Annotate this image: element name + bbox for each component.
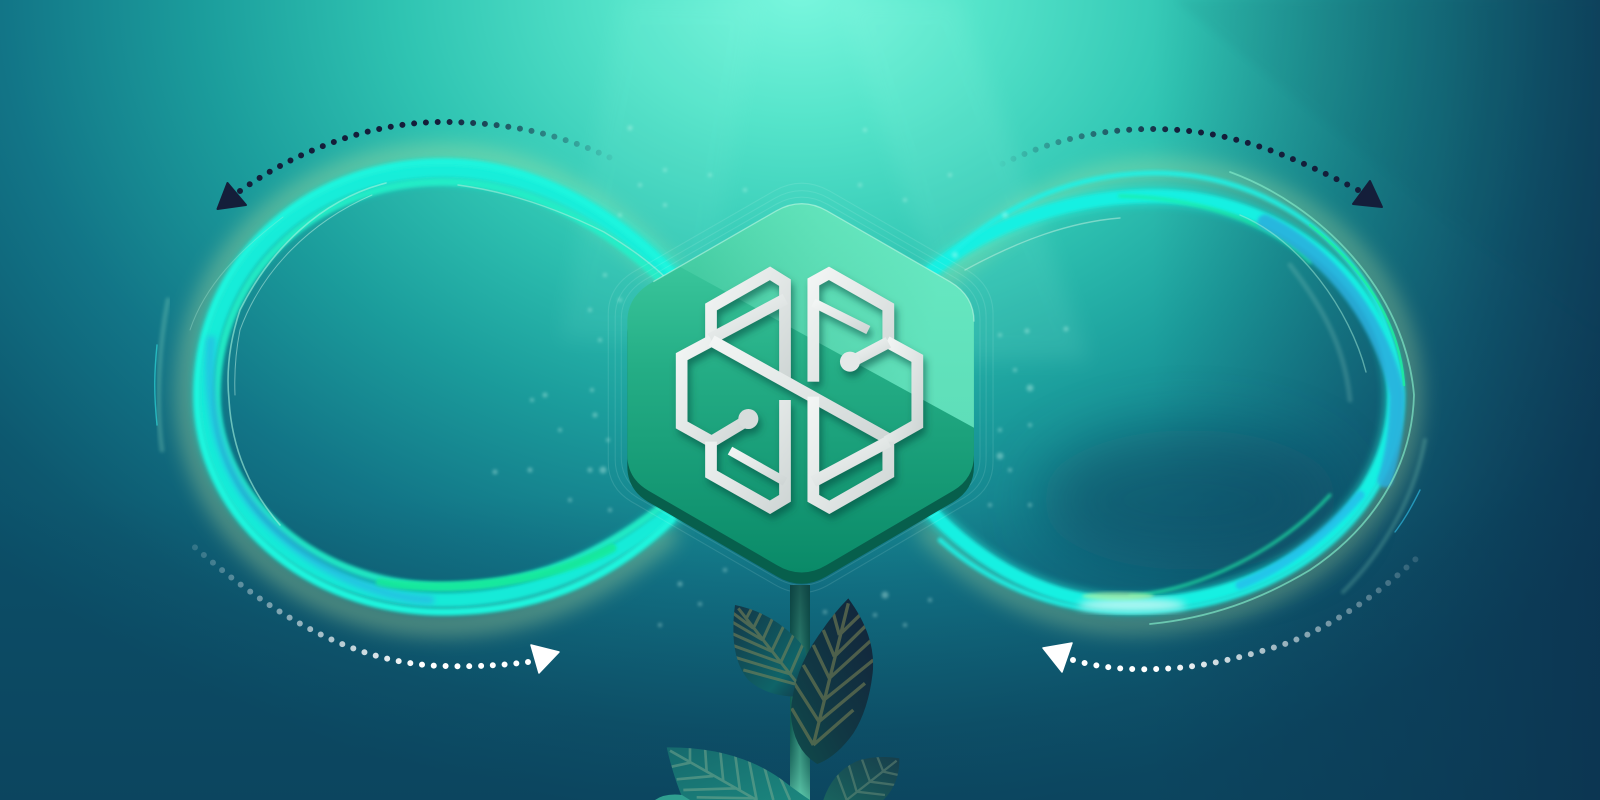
glass highlight [677, 193, 975, 428]
leaf: upper right [788, 597, 875, 767]
leaf: lower right [824, 757, 900, 800]
badge base shadow [627, 215, 974, 584]
dotted arrow: top right [998, 129, 1382, 207]
dotted arrow: top left [218, 122, 619, 209]
infinity loop: left [155, 156, 680, 624]
infinity loop: right [920, 170, 1425, 624]
leaf: small bottom fragment [655, 795, 690, 800]
badge rim [653, 204, 974, 322]
badge face [627, 204, 974, 572]
dotted arrow: bottom right [1043, 552, 1423, 672]
leaf: upper left [734, 605, 806, 696]
leaf: lower left [666, 748, 810, 800]
hexagon badge [627, 193, 975, 584]
stem [790, 585, 810, 800]
particles [492, 126, 1068, 627]
logo mark [682, 273, 917, 507]
light rays [560, 0, 1600, 360]
dotted arrow: bottom left [190, 543, 559, 673]
hexagon halo outlines [608, 183, 993, 593]
